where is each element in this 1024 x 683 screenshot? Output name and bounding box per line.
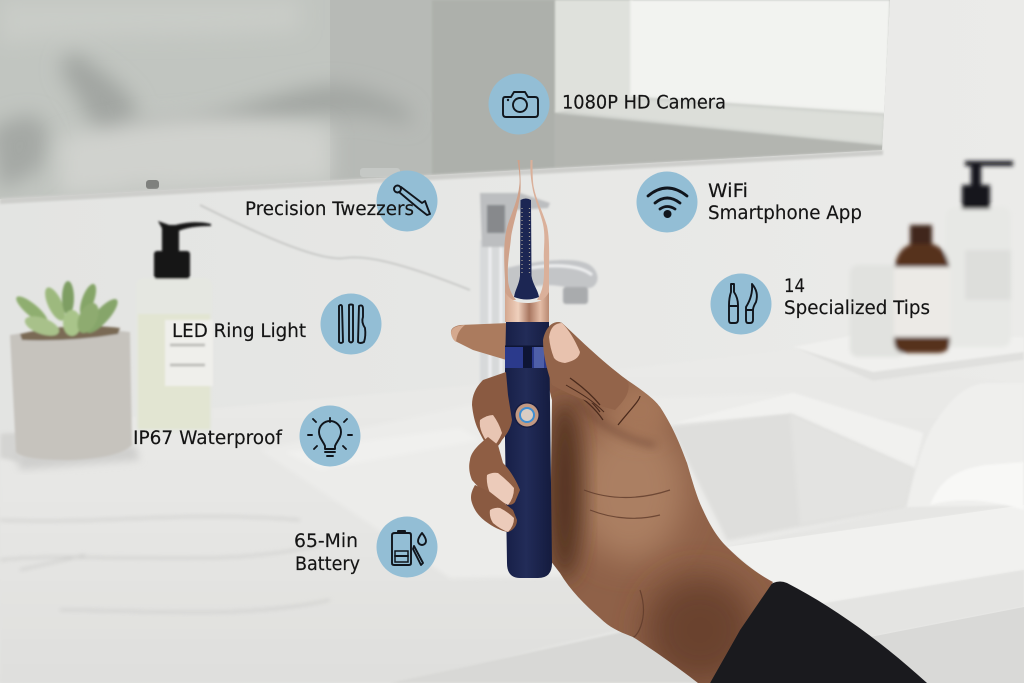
thumb (543, 322, 629, 412)
index finger (451, 323, 510, 361)
near edge left (390, 628, 700, 683)
icon: battery (376, 516, 438, 578)
feature: 1080P HD Camera (488, 74, 726, 134)
label: wifi: WiFi (708, 181, 748, 202)
soap bottle (136, 221, 213, 433)
feature: WiFi Smartphone App (636, 172, 862, 232)
front slab (727, 505, 1024, 604)
curled fingers (469, 372, 520, 532)
icon: probes (320, 294, 382, 354)
faucet (480, 193, 598, 385)
device (504, 160, 552, 578)
rose gold collar (505, 292, 549, 322)
label: wifi (708, 181, 862, 224)
label: battery: Battery (295, 554, 360, 575)
label: wifi: Smartphone App (708, 203, 862, 224)
toiletries on tray (793, 161, 1024, 381)
icon: tips (710, 274, 772, 334)
label: waterproof: IP67 Waterproof (133, 428, 282, 449)
hand holding device (451, 160, 927, 683)
label: tweezers: Precision Twezzers (245, 199, 414, 220)
basin (670, 412, 914, 541)
label: tips (784, 276, 930, 319)
feature: LED Ring Light (172, 294, 382, 354)
label: tips: Specialized Tips (784, 298, 930, 319)
sleeve (710, 582, 927, 683)
camera probe (514, 198, 539, 300)
feature: 14 Specialized Tips (710, 274, 930, 334)
feature: Precision Tweezers (245, 170, 438, 232)
label: LED: LED Ring Light (172, 321, 306, 342)
towel (907, 383, 1024, 510)
feature: IP67 Waterproof (133, 406, 360, 466)
label: camera: 1080P HD Camera (562, 92, 726, 114)
label: battery (294, 531, 360, 575)
icon: tweezers (376, 170, 438, 232)
potted plant (10, 281, 132, 460)
countertop (0, 350, 1024, 683)
mirror edge (0, 150, 883, 204)
band (505, 346, 550, 368)
power button (514, 402, 540, 428)
mirror (0, 0, 890, 200)
palm and wrist (549, 322, 773, 683)
feature: 65-Min Battery (294, 516, 438, 578)
label: tips: 14 (784, 276, 805, 297)
label: battery: 65-Min (294, 531, 358, 552)
icon: camera (488, 74, 550, 134)
icon: light bulb (300, 406, 360, 466)
tweezer arms (504, 160, 521, 300)
icon: wifi (636, 172, 698, 232)
pen body (505, 322, 552, 578)
marble veins (200, 205, 470, 290)
sink rim front (260, 393, 923, 578)
